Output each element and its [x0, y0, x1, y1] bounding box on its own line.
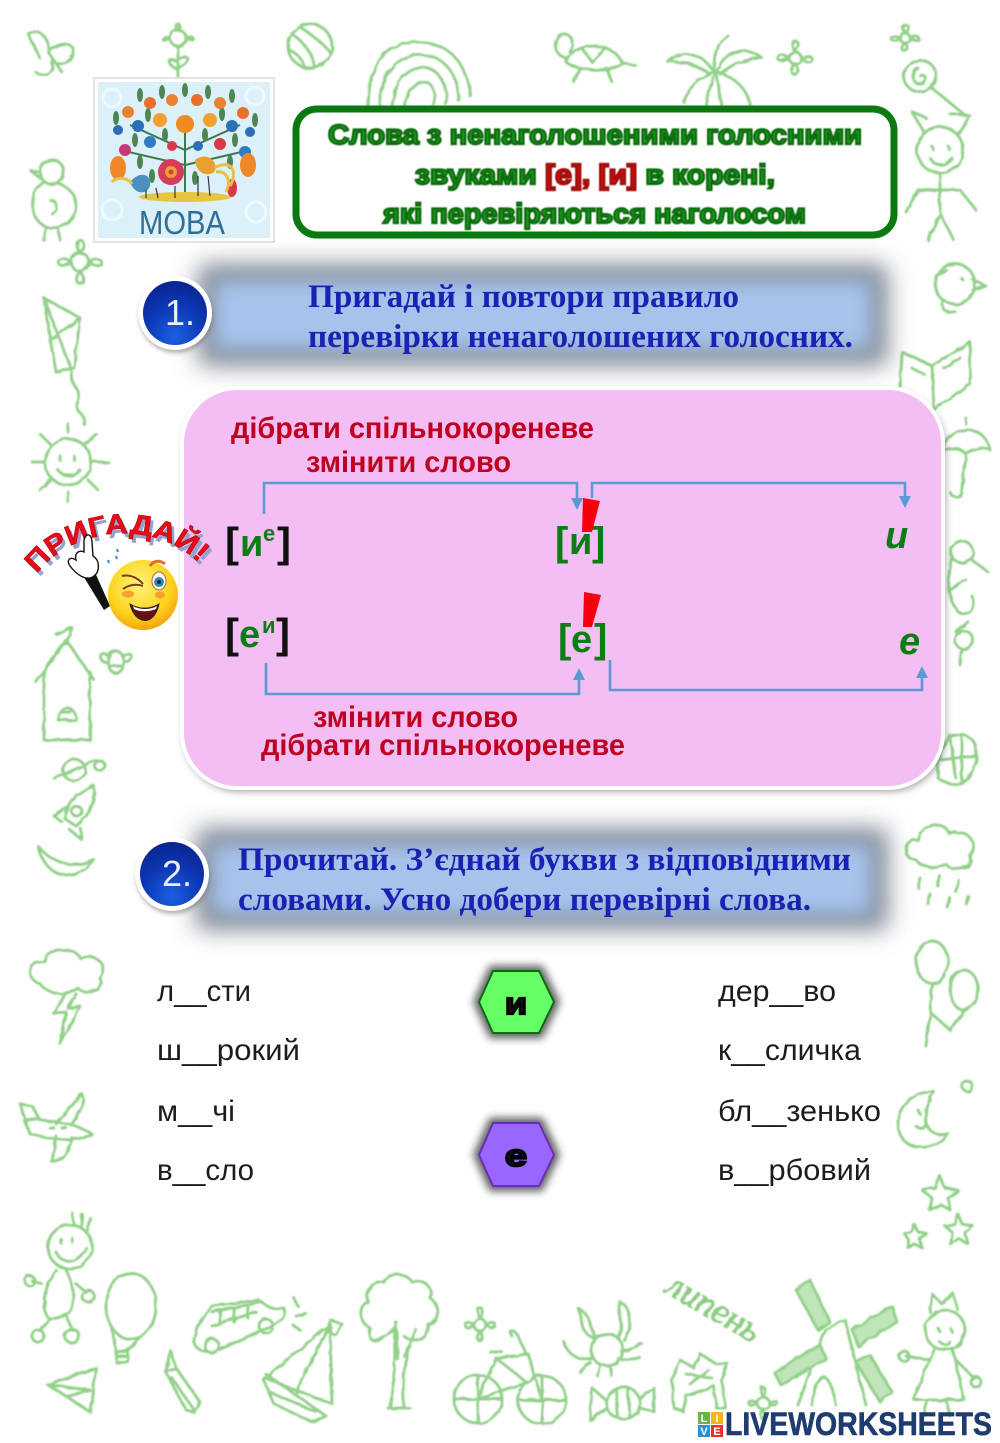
word list: right — [718, 975, 881, 1187]
banner 1: instruction — [198, 264, 888, 366]
icon: moon — [898, 1081, 972, 1147]
icon: storm cloud — [30, 950, 103, 1044]
icon: four coloured squares: V — [700, 1426, 708, 1438]
number badge 1 — [138, 276, 213, 353]
stress mark i — [582, 498, 600, 532]
word list: left: в__сло — [157, 1154, 254, 1187]
text: instruction 1: Пригадай і повтори правило — [308, 279, 739, 315]
heading: title text — [328, 119, 862, 229]
icon: house — [36, 628, 94, 740]
symbol: stressed e: е — [571, 619, 592, 661]
icon: crab — [564, 1302, 642, 1376]
icon: pencil — [166, 1350, 200, 1412]
label: find cognate top: дібрати спільнокореневе — [231, 412, 594, 445]
icon: child right top — [906, 112, 976, 240]
word list: left: ш__рокий — [157, 1034, 300, 1067]
letter: i: и — [885, 515, 908, 557]
icon: sailboat — [264, 1320, 342, 1422]
text: instruction 2: словами. Усно добери перевірні слова. — [238, 882, 811, 918]
symbol: stressed i: ] — [592, 520, 605, 564]
logo: MOVA folk art card — [94, 78, 274, 242]
label: find cognate bottom: дібрати спільнокореневе — [261, 729, 625, 762]
icon: sun — [32, 424, 108, 502]
title box — [296, 109, 894, 236]
icon: four coloured squares: L — [701, 1413, 708, 1425]
number badge 1: 1. — [165, 292, 195, 333]
icon: small flower — [465, 1308, 495, 1341]
text: instruction 1: перевірки ненаголошених голосних. — [308, 319, 853, 355]
arrow: bottom right — [610, 660, 928, 690]
icon: planet — [54, 759, 105, 781]
number badge 2 — [135, 837, 210, 914]
icon: monkey — [949, 541, 988, 614]
symbol: i with e above: ] — [277, 519, 291, 566]
arrow: top left — [264, 483, 583, 514]
symbol: i with e above — [225, 519, 291, 566]
icon: pointing hand — [68, 535, 118, 610]
banner 2: instruction — [196, 828, 888, 930]
icon: umbrella — [942, 418, 990, 497]
symbol: e with i above: ] — [276, 610, 290, 657]
icon: rain cloud — [906, 825, 973, 908]
hexagon: letter i — [479, 971, 554, 1033]
icon: winking smiley — [108, 560, 178, 630]
icon: turtle — [556, 34, 636, 82]
icon: chick right — [935, 264, 986, 313]
symbol: e with i above: е — [239, 614, 260, 656]
icon: right doodle column — [955, 622, 973, 665]
wordart: remember: ПРИГАДАЙ! — [24, 514, 210, 572]
word list: left — [157, 975, 300, 1187]
hexagon: letter e — [479, 1123, 554, 1186]
icon: rocket and moon — [38, 786, 94, 875]
mascot: remember wordart with smiley — [24, 514, 212, 630]
word list: right: в__рбовий — [718, 1154, 871, 1187]
icon: chick — [30, 160, 76, 240]
icon: flowers top right — [778, 25, 919, 74]
number badge 2: 2. — [162, 853, 192, 894]
icon: stars — [904, 1176, 973, 1248]
text: instruction 2 — [238, 842, 851, 918]
symbol: stressed e: [ — [558, 617, 571, 661]
icon: girl with crown — [899, 1292, 981, 1416]
arrow: top right — [592, 483, 911, 508]
heading: title text: які перевіряються наголосом — [382, 198, 806, 229]
arrow: bottom left — [266, 663, 585, 694]
panel: rule diagram — [182, 388, 945, 791]
symbol: stressed i: и — [569, 521, 592, 563]
text doodle: month word: липень — [658, 1263, 768, 1350]
icon: candy — [590, 1387, 654, 1420]
icon: butterfly — [28, 32, 73, 74]
icon: airplane — [20, 1094, 92, 1162]
icon: folk tree — [102, 83, 266, 222]
symbol: e with i above: и — [262, 613, 276, 638]
icon: kite — [44, 298, 85, 424]
icon: four coloured squares — [698, 1412, 723, 1438]
icon: car — [194, 1298, 306, 1353]
wordart: remember: ПРИГАДАЙ! — [27, 518, 212, 576]
symbol: i with e above: е — [263, 521, 275, 546]
icon: book — [900, 342, 970, 410]
icon: tree — [361, 1274, 437, 1408]
word list: left: л__сти — [157, 975, 251, 1008]
word list: right: к__сличка — [718, 1034, 861, 1067]
word list: right: бл__зенько — [718, 1095, 881, 1128]
heading: title text: звуками [е], [и] в корені, — [415, 159, 775, 190]
word list: right: дер__во — [718, 975, 836, 1008]
icon: bicycle — [454, 1331, 566, 1424]
icon: boy — [25, 1213, 94, 1343]
icon: cat — [672, 1354, 726, 1412]
icon: bee — [100, 651, 132, 673]
icon: hot air balloon — [106, 1273, 156, 1362]
symbol: e with i above — [225, 610, 290, 657]
stress mark e — [583, 592, 601, 627]
icon: windmill — [774, 1280, 897, 1405]
icon: ball — [288, 24, 332, 68]
icon: four coloured squares: E — [713, 1426, 721, 1438]
label: change word top: змінити слово — [306, 446, 511, 479]
icon: balloons — [916, 941, 978, 1046]
icon: paper plane — [48, 1368, 96, 1412]
icon: flower left — [58, 240, 102, 284]
hexagon: letter i: и — [505, 986, 527, 1021]
symbol: e with i above: [ — [225, 610, 239, 657]
symbol: stressed i — [555, 498, 605, 564]
symbol: stressed e: ] — [594, 617, 607, 661]
icon: flower top — [162, 24, 194, 76]
letter: e: е — [899, 621, 920, 663]
text: MOVA: MOBA — [139, 204, 225, 241]
icon: small flower 2 — [749, 1387, 777, 1419]
icon: four coloured squares: I — [715, 1413, 719, 1425]
symbol: i with e above: [ — [225, 519, 239, 566]
text: instruction 2: Прочитай. З’єднай букви з відповідними — [238, 842, 851, 878]
symbol: stressed i: [ — [555, 520, 568, 564]
symbol: stressed e — [558, 592, 607, 661]
text: instruction 1 — [308, 279, 853, 355]
icon: rainbow — [368, 42, 470, 112]
symbol: i with e above: и — [240, 523, 263, 565]
heading: title text: Слова з ненаголошеними голосними — [328, 119, 862, 150]
word list: left: м__чі — [157, 1095, 235, 1128]
icon: shell — [938, 735, 977, 784]
label: change word bottom: змінити слово — [313, 701, 518, 734]
icon: palm tree — [668, 36, 762, 128]
icon: lollipop — [904, 60, 966, 116]
hexagon: letter e: е — [505, 1138, 527, 1173]
